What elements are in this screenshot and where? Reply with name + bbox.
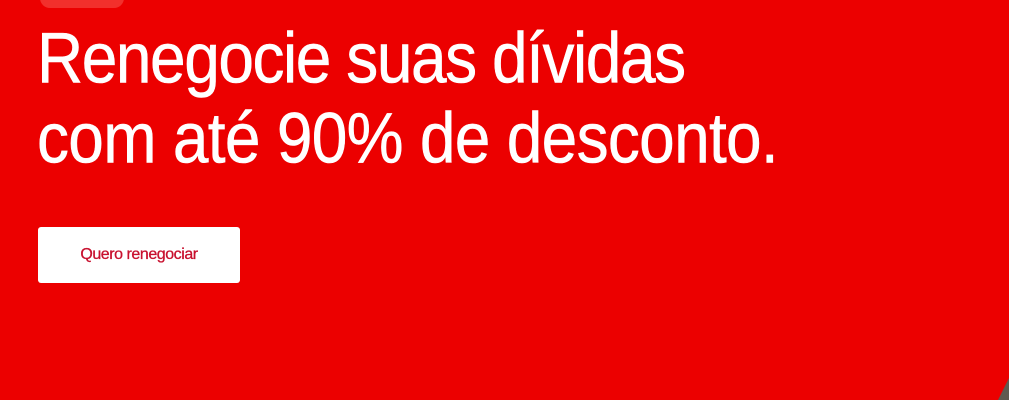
title <box>37 18 778 177</box>
tag: partially cropped badge <box>40 0 124 8</box>
corner: dark image fragment <box>998 378 1009 400</box>
button: Quero renegociar: Quero renegociar <box>80 246 198 263</box>
title: Renegocie suas dívidas <box>37 18 685 97</box>
button: Quero renegociar <box>38 227 240 283</box>
title: com até 90% de desconto. <box>37 97 778 177</box>
